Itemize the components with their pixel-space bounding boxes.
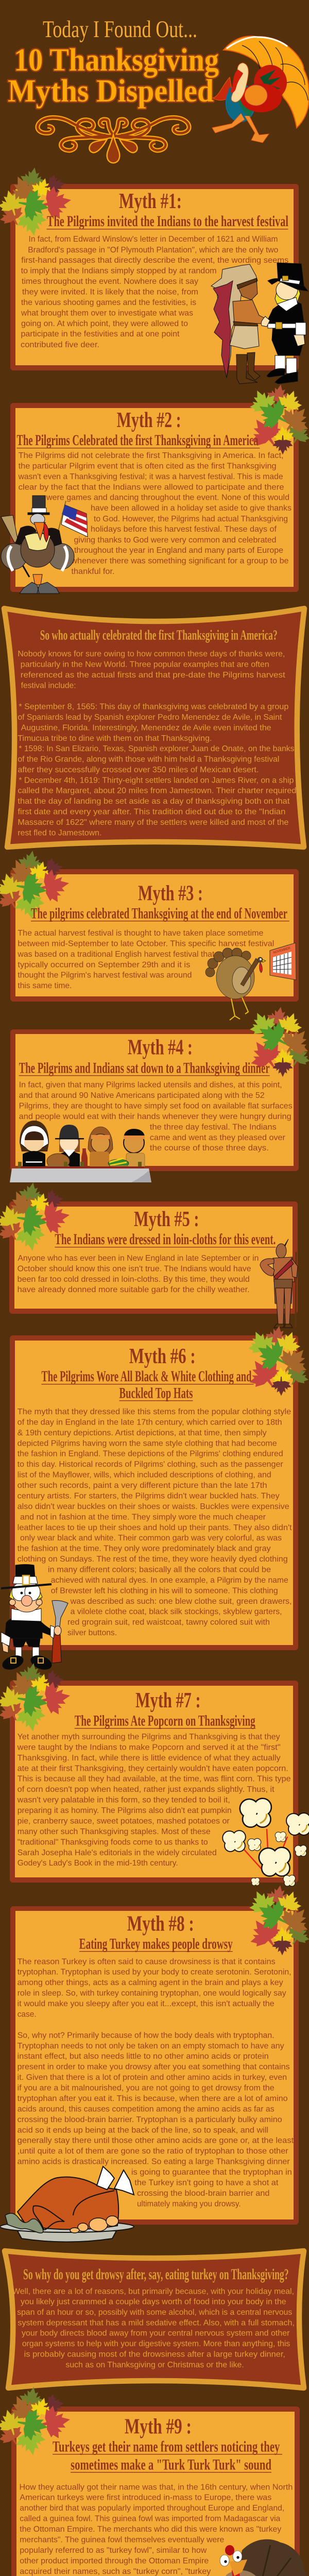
body text: myth 8: ,until quite a lot of them are gone so the ratio of tryptophan to those other [18, 2147, 288, 2156]
body text: myth 2: whenever there was something significant for a group to be [71, 556, 289, 566]
heading: myth 2 [16, 409, 260, 449]
body text: myth 9: popularly referred to as "turkey fowl", similar to how [20, 2546, 207, 2555]
body text: who celebrated first: after they successfully crossed over 350 miles of Mexican desert. [18, 766, 259, 774]
heading: myth 6 [41, 1345, 253, 1401]
icon: November calendar: NOVEMBER [273, 947, 291, 955]
icon: Indian and Pilgrim shaking hands [211, 263, 308, 384]
heading: myth 6: Buckled Top Hats [119, 1384, 193, 1401]
title: 10 Thanksgiving Myths Dispelled: 10 Thanksgiving [14, 43, 219, 78]
body text: myth 3: typically occurred on September 29th and it is [18, 960, 190, 969]
icon: pilgrim turkey with flag and gun [1, 496, 88, 594]
heading: myth 8 [79, 1912, 233, 1952]
body text: myth 7: pie, cranberry sauce, sweet potatoes, mashed potatoes or [18, 1817, 230, 1826]
body text: myth 7: Thanksgiving. In fact, while there is little evidence of what they actually [18, 1754, 281, 1762]
body text: why drowsy: organ systems to help with your digestive system. More than anything, this [22, 2340, 290, 2348]
body text: myth 7: were taught by the Indians to make Popcorn and served it at the "first" [17, 1743, 281, 1752]
body text: myth 9: American turkeys were first introduced in-mass to Europe, there was [20, 2494, 271, 2502]
body text: myth 6: achieved with natural dyes. In one example, a Pilgrim by the name [51, 1576, 288, 1585]
heading: myth 4 [19, 1036, 270, 1076]
body text: myth 1: to imply that the Indians simply stopped by at random [21, 267, 217, 276]
body text: myth 4: the course of those three days. [150, 1144, 269, 1153]
body text: who celebrated first: called the Margaret, about 20 miles from Jamestown. Their charter required [18, 787, 296, 795]
body text: myth 8: it. Given that there is a lot of protein and other amino acids in turkey, even [18, 2073, 287, 2082]
body text: myth 6: was described as such: one blew clothe suit, green drawers, [70, 1597, 292, 1606]
body text: myth 2: have been allowed in a holiday set aside to give thanks [91, 504, 291, 513]
body text: myth 6: to this day. Historical records of Pilgrims' clothing, such as the passenger [18, 1460, 283, 1469]
body text: myth 1: participate in the festivities and at one point [21, 330, 180, 338]
heading: myth 2: Myth #2 : [117, 409, 181, 432]
heading: myth 9 [53, 2415, 282, 2473]
body text: who celebrated first: of Spaniards lead by Spanish explorer Pedro Menendez de Avile, in Saint [18, 713, 282, 722]
body text: myth 3: this same time. [18, 981, 72, 990]
body text: who celebrated first: * September 8, 1565: This day of thanksgiving was celebrated by a group [19, 703, 288, 711]
body text: myth 4: came and went as they pleased over [150, 1133, 286, 1142]
body text: who celebrated first: rest fled to Jamestown. [18, 828, 101, 837]
icon: leaves myth 4 [243, 1005, 309, 1077]
body text: myth 4: Pilgrims, they are thought to have simply set food on available flat surfaces [19, 1101, 293, 1111]
body text: myth 5 [18, 1254, 259, 1294]
body text: who celebrated first: of the Rio Grande, along with those with him held a Thanksgiving festival [18, 755, 279, 764]
body text: who celebrated first: Augustine, Florida. Interestingly, Menendez de Avile even invited the [21, 723, 271, 732]
icon: leaves myth 2 [243, 382, 309, 455]
heading: myth 3 [31, 882, 289, 922]
body text: myth 8: instant effect, but also needs little to no other amino acids or protein [18, 2052, 269, 2061]
body text: myth 4: and that around 90 Native Americans participated along with the 52 [19, 1091, 265, 1100]
body text: myth 6: of the day in England in the late 17th century, which carried over to 18th [18, 1418, 282, 1427]
body text: myth 8: acid so it ends up being at the back of the line, so to speak, and will [18, 2126, 268, 2134]
body text: myth 8: is going to guarantee that the tryptophan in [131, 2168, 292, 2177]
icon: pilgrims and Indians at table [10, 1121, 151, 1182]
body text: myth 1: first-hand passages that directly describe the event, the wording seems [21, 256, 288, 265]
body text: myth 1 [21, 235, 288, 349]
body text: myth 1: In fact, from Edward Winslow's letter in December of 1621 and William [29, 235, 278, 244]
title block [8, 16, 219, 109]
panel: myth 7 [0, 1661, 298, 1883]
body text: myth 6: and not in fashion at the time. They simply wore the much cheaper [20, 1513, 266, 1521]
body text: myth 6: leather laces to tie up their shoes and hold up their pants. They also didn't [18, 1523, 292, 1532]
body text: myth 6: in many different colors; basically all the colors that could be [48, 1565, 271, 1574]
body text: myth 7: This is because all they had available, at the time, was flint corn. This type [18, 1775, 291, 1784]
body text: myth 2: clear by the fact that the Indians were allowed to participate and there [19, 483, 284, 492]
body text: myth 4 [19, 1081, 293, 1153]
title: 10 Thanksgiving Myths Dispelled [8, 43, 219, 109]
heading: myth 6: Myth #6 : [129, 1345, 196, 1368]
body text: myth 6 [18, 1408, 292, 1637]
body text: myth 9: acquired their names, such as "turkey corn", "turkey [20, 2567, 211, 2576]
body text: myth 8: The reason Turkey is often said to cause drowsiness is that it contains [18, 1957, 276, 1966]
body text: myth 1: what brought them over to investigate what was [21, 309, 193, 317]
body text: myth 9: other product imported through the Ottoman Empire [20, 2556, 209, 2565]
heading: myth 7 [75, 1689, 255, 1729]
body text: myth 9: the Ottoman Empire. The merchants who did this were known as "turkey [20, 2525, 281, 2534]
heading: myth 1 [46, 190, 288, 230]
body text: myth 3: between mid-September to late October. This specific harvest festival [18, 939, 274, 948]
icon: leaves myth 9 [0, 2385, 73, 2458]
body text: myth 2: holidays before this harvest festival. These days of [91, 525, 277, 534]
title: 10 Thanksgiving Myths Dispelled: Myths Dispelled [8, 74, 214, 109]
body text: who celebrated first: festival include: [21, 681, 76, 690]
body text: myth 7: ate at their first Thanksgiving, they certainly wouldn't have eaten popcorn. [18, 1764, 288, 1773]
panel: myth 9 [0, 2385, 300, 2576]
body text: myth 2: to God. However, the Pilgrims had actual Thanksgiving [94, 515, 288, 523]
body text: myth 9: called a guinea fowl. This guinea fowl was imported from Madagascar via [20, 2515, 280, 2523]
icon: cartoon pilgrim with blunderbuss [1, 1564, 68, 1672]
body text: myth 4: In fact, given that many Pilgrims lacked utensils and dishes, at this point, [19, 1081, 282, 1090]
body text: myth 3: was based on a traditional English harvest festival that [17, 950, 215, 959]
body text: myth 8: the Turkey isn't going to have a shot at [134, 2178, 279, 2188]
body text: myth 1: contributed five deer. [21, 341, 99, 349]
body text: myth 1: going on. At which point, they were allowed to [21, 319, 188, 328]
body text: why drowsy: span of an hour or so, possibly with some alcohol, which is a central nervous [17, 2308, 292, 2317]
body text: myth 3: thought the Pilgrim's harvest festival was around [18, 971, 192, 980]
heading: myth 3: Myth #3 : [138, 882, 203, 906]
body text: myth 7: many other such Thanksgiving staples. Most of these [18, 1827, 211, 1836]
body text: myth 7: preparing it as hominy. The Pilgrims also didn't eat pumpkin [18, 1806, 232, 1815]
body text: myth 6: century artists. For starters, the Pilgrims didn't wear buckled hats. They [18, 1492, 280, 1500]
body text: myth 7: Yet another myth surrounding the Pilgrims and Thanksgiving is that they [18, 1733, 280, 1741]
body text: myth 7 [17, 1733, 291, 1868]
body text: myth 5: October should know this one isn't true. The Indians would have [18, 1264, 251, 1274]
icon: leaves myth 8 [242, 1883, 309, 1956]
body text: why drowsy: your body directs blood away from your central nervous system and other [22, 2329, 290, 2338]
body text: myth 7: of corn doesn't pop when heated, rather just expands slightly. Thus, it [18, 1785, 274, 1794]
icon: leaves myth 3 [0, 849, 72, 922]
body text: myth 8: ultimately making you drowsy. [137, 2199, 241, 2208]
body text: myth 6: only wear black and white. Their common garb was very colorful, as was [20, 1534, 282, 1543]
body text: myth 1: times throughout the event. Nowhere does it say [22, 277, 198, 286]
body text: myth 4: and people would eat with their hands whenever they were hungry during [19, 1112, 291, 1121]
heading: myth 5: Myth #5 : [134, 1208, 199, 1231]
body text: who celebrated first: Timucua tribe to dine with them on that Thanksgiving. [18, 734, 212, 743]
heading: myth 4: Myth #4 : [128, 1036, 193, 1060]
icon: leaves myth 7 [0, 1661, 73, 1734]
body text: who celebrated first: Massacre of 1622" where many of the settlers were killed and most of the [18, 818, 288, 827]
body text: myth 5: Anyone who has ever been in New England in late September or in [18, 1254, 259, 1263]
icon: 3D cartoon turkey [220, 2539, 307, 2576]
body text: myth 8: if you are a bit malnourished, you are not going to get drowsy from the [18, 2084, 274, 2093]
body text: myth 6: other such records, paint a very different picture than the late 17th [18, 1481, 267, 1490]
body text: myth 8: it would make you sleepy after you eat it...except, this isn't actually the [18, 1999, 274, 2008]
body text: myth 6: of Brewster left his clothing in his will to someone. This clothing [51, 1586, 278, 1595]
body text: who celebrated first [18, 650, 296, 837]
body text: who celebrated first: referenced as the actual firsts and that pre-date the Pilgrims harvest [21, 671, 285, 680]
body text: myth 2: the particular Pilgrim event that is often cited as the first Thanksgiving [19, 462, 277, 471]
icon: colourful turkey [212, 36, 309, 143]
body text: myth 6: list of the Mayflower, wills, which included descriptions of clothing, and [18, 1471, 271, 1480]
body text: myth 6: depicted Pilgrims having worn the same style clothing that had become [18, 1439, 277, 1448]
body text: who celebrated first: Nobody knows for sure owing to how common these days of thanks were, [18, 650, 285, 658]
body text: myth 8: tryptophan after you eat it. This is because, when there are a lot of amino [18, 2094, 288, 2103]
body text: myth 6: clothing on Sundays. The rest of the time, they wore heavily dyed clothing [18, 1555, 288, 1564]
body text: myth 7: Sarah Josepha Hale's editorials in the widely circulated [18, 1849, 217, 1857]
panel: myth 3 [0, 849, 299, 1002]
body text: myth 2: thankful for. [71, 567, 114, 576]
body text: myth 8: present in order to make you drowsy after you eat something that contains [18, 2063, 290, 2072]
body text: who celebrated first: first date and every year after. This tradition died out due to the "Indian [18, 808, 285, 817]
body text: myth 8: Tryptophan needs to not only be taken on an empty stomach to have any [18, 2042, 284, 2050]
ornament: scroll flourish [38, 117, 189, 163]
body text: myth 8: So, why not? Primarily because of how the body deals with tryptophan. [18, 2031, 274, 2040]
body text: myth 8: role in sleep. So, with turkey containing tryptophan, one would logically say [18, 1989, 286, 1998]
body text: myth 9 [19, 2483, 293, 2576]
body text: myth 6: also didn't wear buckles on their shoes or waists. Buckles were expensive [18, 1502, 289, 1511]
body text: why drowsy: is probably causing most of the drowsiness after a large turkey dinner, [24, 2350, 285, 2359]
panel: myth 2 [10, 382, 309, 592]
title: Today I Found Out: Today I Found Out... [43, 16, 197, 43]
body text: myth 6: The myth that they dressed like this stems from the popular clothing style [18, 1408, 291, 1416]
body text: why drowsy: you likely just crammed a couple days worth of food into your body in the [21, 2298, 286, 2307]
body text: myth 8: crossing the blood-brain barrier. Tryptophan is a particularly bulky amino [18, 2115, 282, 2124]
body text: myth 8: amino acids is drastically increased. So eating a large Thanksgiving dinner [18, 2158, 290, 2166]
body text: myth 9: another bird that was popularly imported throughout Europe and England, [20, 2504, 284, 2513]
icon: popping popcorn [222, 1798, 309, 1887]
body text: myth 5: been far too cold dressed in loin-cloths. By this time, they would [18, 1275, 250, 1284]
body text: myth 3 [17, 929, 274, 990]
body text: myth 6: the fashion in England. These depictions of the Pilgrims' clothing endured [18, 1450, 283, 1459]
body text: myth 8: among other things, acts as a calming agent in the brain and plays a key [18, 1978, 283, 1987]
body text: myth 1: they were invited. It is likely that the noise, from [22, 287, 198, 297]
body text: myth 5: have already donned more suitable garb for the chilly weather. [18, 1285, 250, 1294]
body text: myth 2: were games and dancing throughout the event. None of this would [46, 494, 289, 502]
icon: leaves myth 6 [241, 1324, 309, 1396]
banner: why drowsy [5, 2251, 304, 2388]
heading: myth 1: Myth #1: [119, 190, 182, 213]
body text: myth 2: The Pilgrims did not celebrate the first Thanksgiving in America. In fact, [19, 451, 284, 460]
panel: myth 8 [10, 1883, 309, 2225]
body text: myth 6: silver buttons. [67, 1629, 117, 1637]
body text: myth 4: the three day festival. The Indians [150, 1123, 277, 1131]
body text: why drowsy [12, 2287, 295, 2369]
body text: myth 7: "traditional" Thanksgiving foods come to us thanks to [18, 1838, 208, 1846]
panel: myth 6 [10, 1324, 309, 1650]
body text: myth 1: Bradford's passage in "Of Plymouth Plantation", which are the only two [28, 246, 278, 255]
body text: myth 2: giving thanks to God were very common and celebrated [74, 536, 276, 545]
body text: myth 8: generally stay there until those other amino acids are gone or, at the least [18, 2137, 294, 2145]
body text: myth 6: a vilolete clothe coat, black silk stockings, skyblew garters, [71, 1607, 282, 1616]
body text: myth 6: the fashion at the time. They only wore predominately black and gray [18, 1545, 271, 1553]
body text: why drowsy: such as on Thanksgiving or Christmas or the like. [65, 2361, 244, 2369]
body text: who celebrated first: * 1598: In San Elizario, Texas, Spanish explorer Juan de Onate, on the banks [19, 744, 294, 753]
body text: myth 8: tryptophan. Tryptophan is used by your body to create serotonin. Serotonin, [18, 1968, 291, 1977]
body text: myth 9: merchants". The guinea fowl themselves eventually were [20, 2536, 224, 2544]
panel: myth 5 [0, 1180, 298, 1314]
body text: who celebrated first: that the day of landing be set aside as a day of thanksgiving both on that [18, 797, 290, 806]
body text: why drowsy: system depressant that has a mild sedative effect. Also, with a full stomach, [18, 2318, 295, 2327]
body text: myth 6: & 19th century depictions. Artist depictions, at that time, then simply [18, 1429, 267, 1437]
panel: myth 4 [10, 1005, 309, 1171]
body text: myth 7: wasn't very palatable in this form, so they tended to boil it, [17, 1796, 230, 1805]
body text: myth 2: wasn't even a Thanksgiving festival; it was a harvest festival. This is made [18, 472, 283, 481]
body text: myth 1: the various shooting games and the festivities, is [21, 298, 196, 307]
body text: myth 8: case. [18, 2010, 37, 2019]
icon: Native American figure [260, 1239, 298, 1328]
icon: leaves myth 1 [0, 165, 74, 239]
body text: myth 8: acids around, this causes competition among the amino acids as far as [18, 2105, 274, 2113]
heading: myth 9: Myth #9 : [125, 2415, 192, 2438]
banner: who celebrated first [4, 608, 304, 847]
body text: why drowsy: Well, there are a lot of reasons, but primarily because, with your holiday meal, [12, 2287, 294, 2296]
body text: who celebrated first: * December 4th, 1619: Thirty-eight settlers landed on James River, on a ship [19, 776, 294, 785]
body text: myth 2: throughout the year in England and many parts of Europe [74, 546, 283, 555]
body text: myth 3: The actual harvest festival is thought to have taken place sometime [18, 929, 264, 938]
body text: myth 6: red grograin suit, red waistcoat, tawny colored suit with [67, 1618, 270, 1627]
heading: myth 8: Myth #8 : [127, 1912, 194, 1936]
body text: who celebrated first: particularly in the New World. Three popular examples that are often [21, 660, 269, 669]
body text: myth 8: crossing the blood-brain barrier and [137, 2189, 270, 2198]
icon: leaves myth 5 [0, 1180, 73, 1253]
heading: myth 7: Myth #7 : [135, 1689, 201, 1713]
body text: myth 2 [18, 451, 291, 576]
icon: roast turkey on platter [0, 2166, 134, 2242]
body text: myth 7: Godey's Lady's Book in the mid-19th century. [18, 1859, 178, 1868]
heading: myth 5 [55, 1208, 276, 1248]
icon: turkey looking at calendar [205, 948, 266, 1020]
icon: November calendar [270, 943, 296, 980]
body text: myth 9: How they actually got their name was that, in the 16th century, when North [20, 2483, 293, 2492]
body text: myth 8 [18, 1957, 294, 2208]
panel: myth 1 [0, 165, 299, 370]
